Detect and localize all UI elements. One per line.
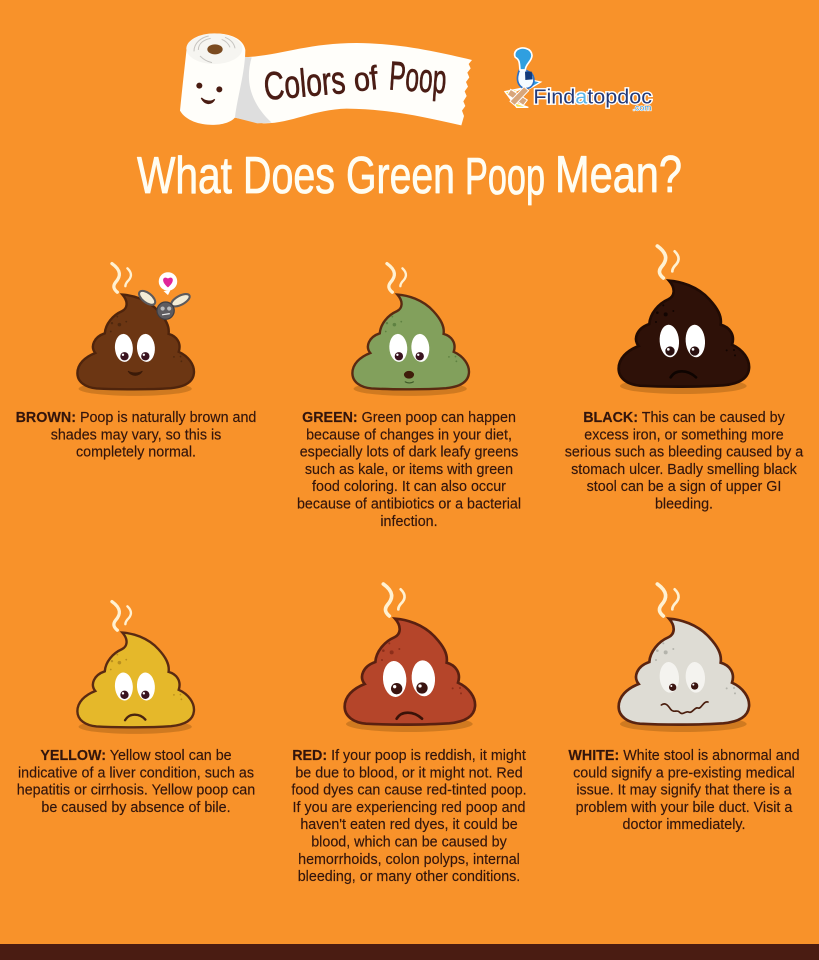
text: white: WHITE:: [568, 748, 619, 764]
paper strip: [233, 43, 472, 125]
roll body: [180, 34, 245, 125]
Findatopdoc logo: [505, 48, 652, 113]
text: green: infection.: [380, 514, 438, 530]
main heading: [137, 146, 682, 206]
banner title: of: [352, 60, 380, 99]
text: red: hemorrhoids, colon polyps, internal: [298, 852, 520, 868]
text: white: doctor immediately.: [623, 817, 745, 833]
poop: yellow: [77, 602, 194, 734]
text: red: RED:: [292, 748, 327, 764]
text: black: stool can be a sign of upper GI: [587, 479, 781, 495]
poop: red: [345, 584, 475, 732]
text: red: blood, which can be caused by: [311, 834, 508, 850]
text: red: food dyes can cause red-tinted poop.: [291, 783, 527, 799]
text: yellow: be caused by absence of bile.: [41, 800, 231, 816]
text: black: excess iron, or something more: [584, 427, 784, 443]
text: black: bleeding.: [655, 496, 713, 512]
poop: black: [619, 246, 749, 394]
text: green: such as kale, or items with green: [305, 462, 513, 478]
text: white: White stool is abnormal and: [623, 748, 800, 764]
banner title: Colors: [262, 58, 347, 109]
text: green: Green poop can happen: [362, 410, 516, 426]
main heading: Poop: [465, 148, 545, 206]
main heading: Green: [346, 147, 455, 205]
fly with heart bubble: [137, 272, 192, 319]
poop: brown: [77, 264, 194, 396]
banner title: Poop: [388, 52, 448, 102]
text: green: food coloring. It can also occur: [312, 479, 506, 495]
text: black: BLACK:: [583, 410, 638, 426]
text: green: because of antibiotics or a bacterial: [297, 496, 521, 512]
text: white: could signify a pre-existing medical: [573, 765, 795, 781]
text: brown: shades may vary, so this is: [51, 427, 221, 443]
text: yellow: hepatitis or cirrhosis. Yellow poop can: [17, 783, 255, 799]
text: yellow: Yellow stool can be: [110, 748, 232, 764]
main heading: What: [137, 147, 232, 205]
banner title: [262, 52, 448, 109]
roll shadow: [234, 57, 272, 123]
text: yellow: YELLOW:: [40, 748, 106, 764]
text: black: stomach ulcer. Badly smelling black: [571, 462, 798, 478]
text: brown: completely normal.: [76, 445, 196, 461]
main heading: Mean?: [555, 146, 682, 204]
text: black: serious such as bleeding caused by a: [565, 445, 803, 461]
text: black: This can be caused by: [642, 410, 785, 426]
text: green: GREEN:: [302, 410, 358, 426]
poop: white: [619, 584, 749, 732]
toilet paper roll banner: [180, 33, 472, 125]
logo wordmark: Findatopdoc: [533, 86, 652, 108]
text: brown: BROWN:: [16, 410, 76, 426]
text: red: be due to blood, or it might not. Red: [295, 765, 523, 781]
text: white: issue. It may signify that there is a: [576, 783, 792, 799]
footer bar: [0, 944, 819, 960]
text: green: especially lots of dark leafy greens: [300, 445, 518, 461]
main heading: Does: [243, 147, 335, 205]
text: yellow: indicative of a liver condition, such as: [18, 765, 254, 781]
roll face: [196, 83, 222, 103]
text: green: because of changes in your diet,: [306, 427, 512, 443]
text: brown: Poop is naturally brown and: [80, 410, 256, 426]
text: red: If you are experiencing red poop and: [293, 800, 525, 816]
text: red: bleeding, or many other conditions.: [298, 869, 520, 885]
duck mascot: [505, 48, 541, 107]
text: red: haven't eaten red dyes, it could be: [300, 817, 518, 833]
text: red: If your poop is reddish, it might: [331, 748, 526, 764]
text: white: problem with your bile duct. Visit a: [576, 800, 792, 816]
roll top: [186, 33, 242, 64]
poop: green: [352, 264, 469, 396]
logo .com: .com: [633, 103, 651, 113]
